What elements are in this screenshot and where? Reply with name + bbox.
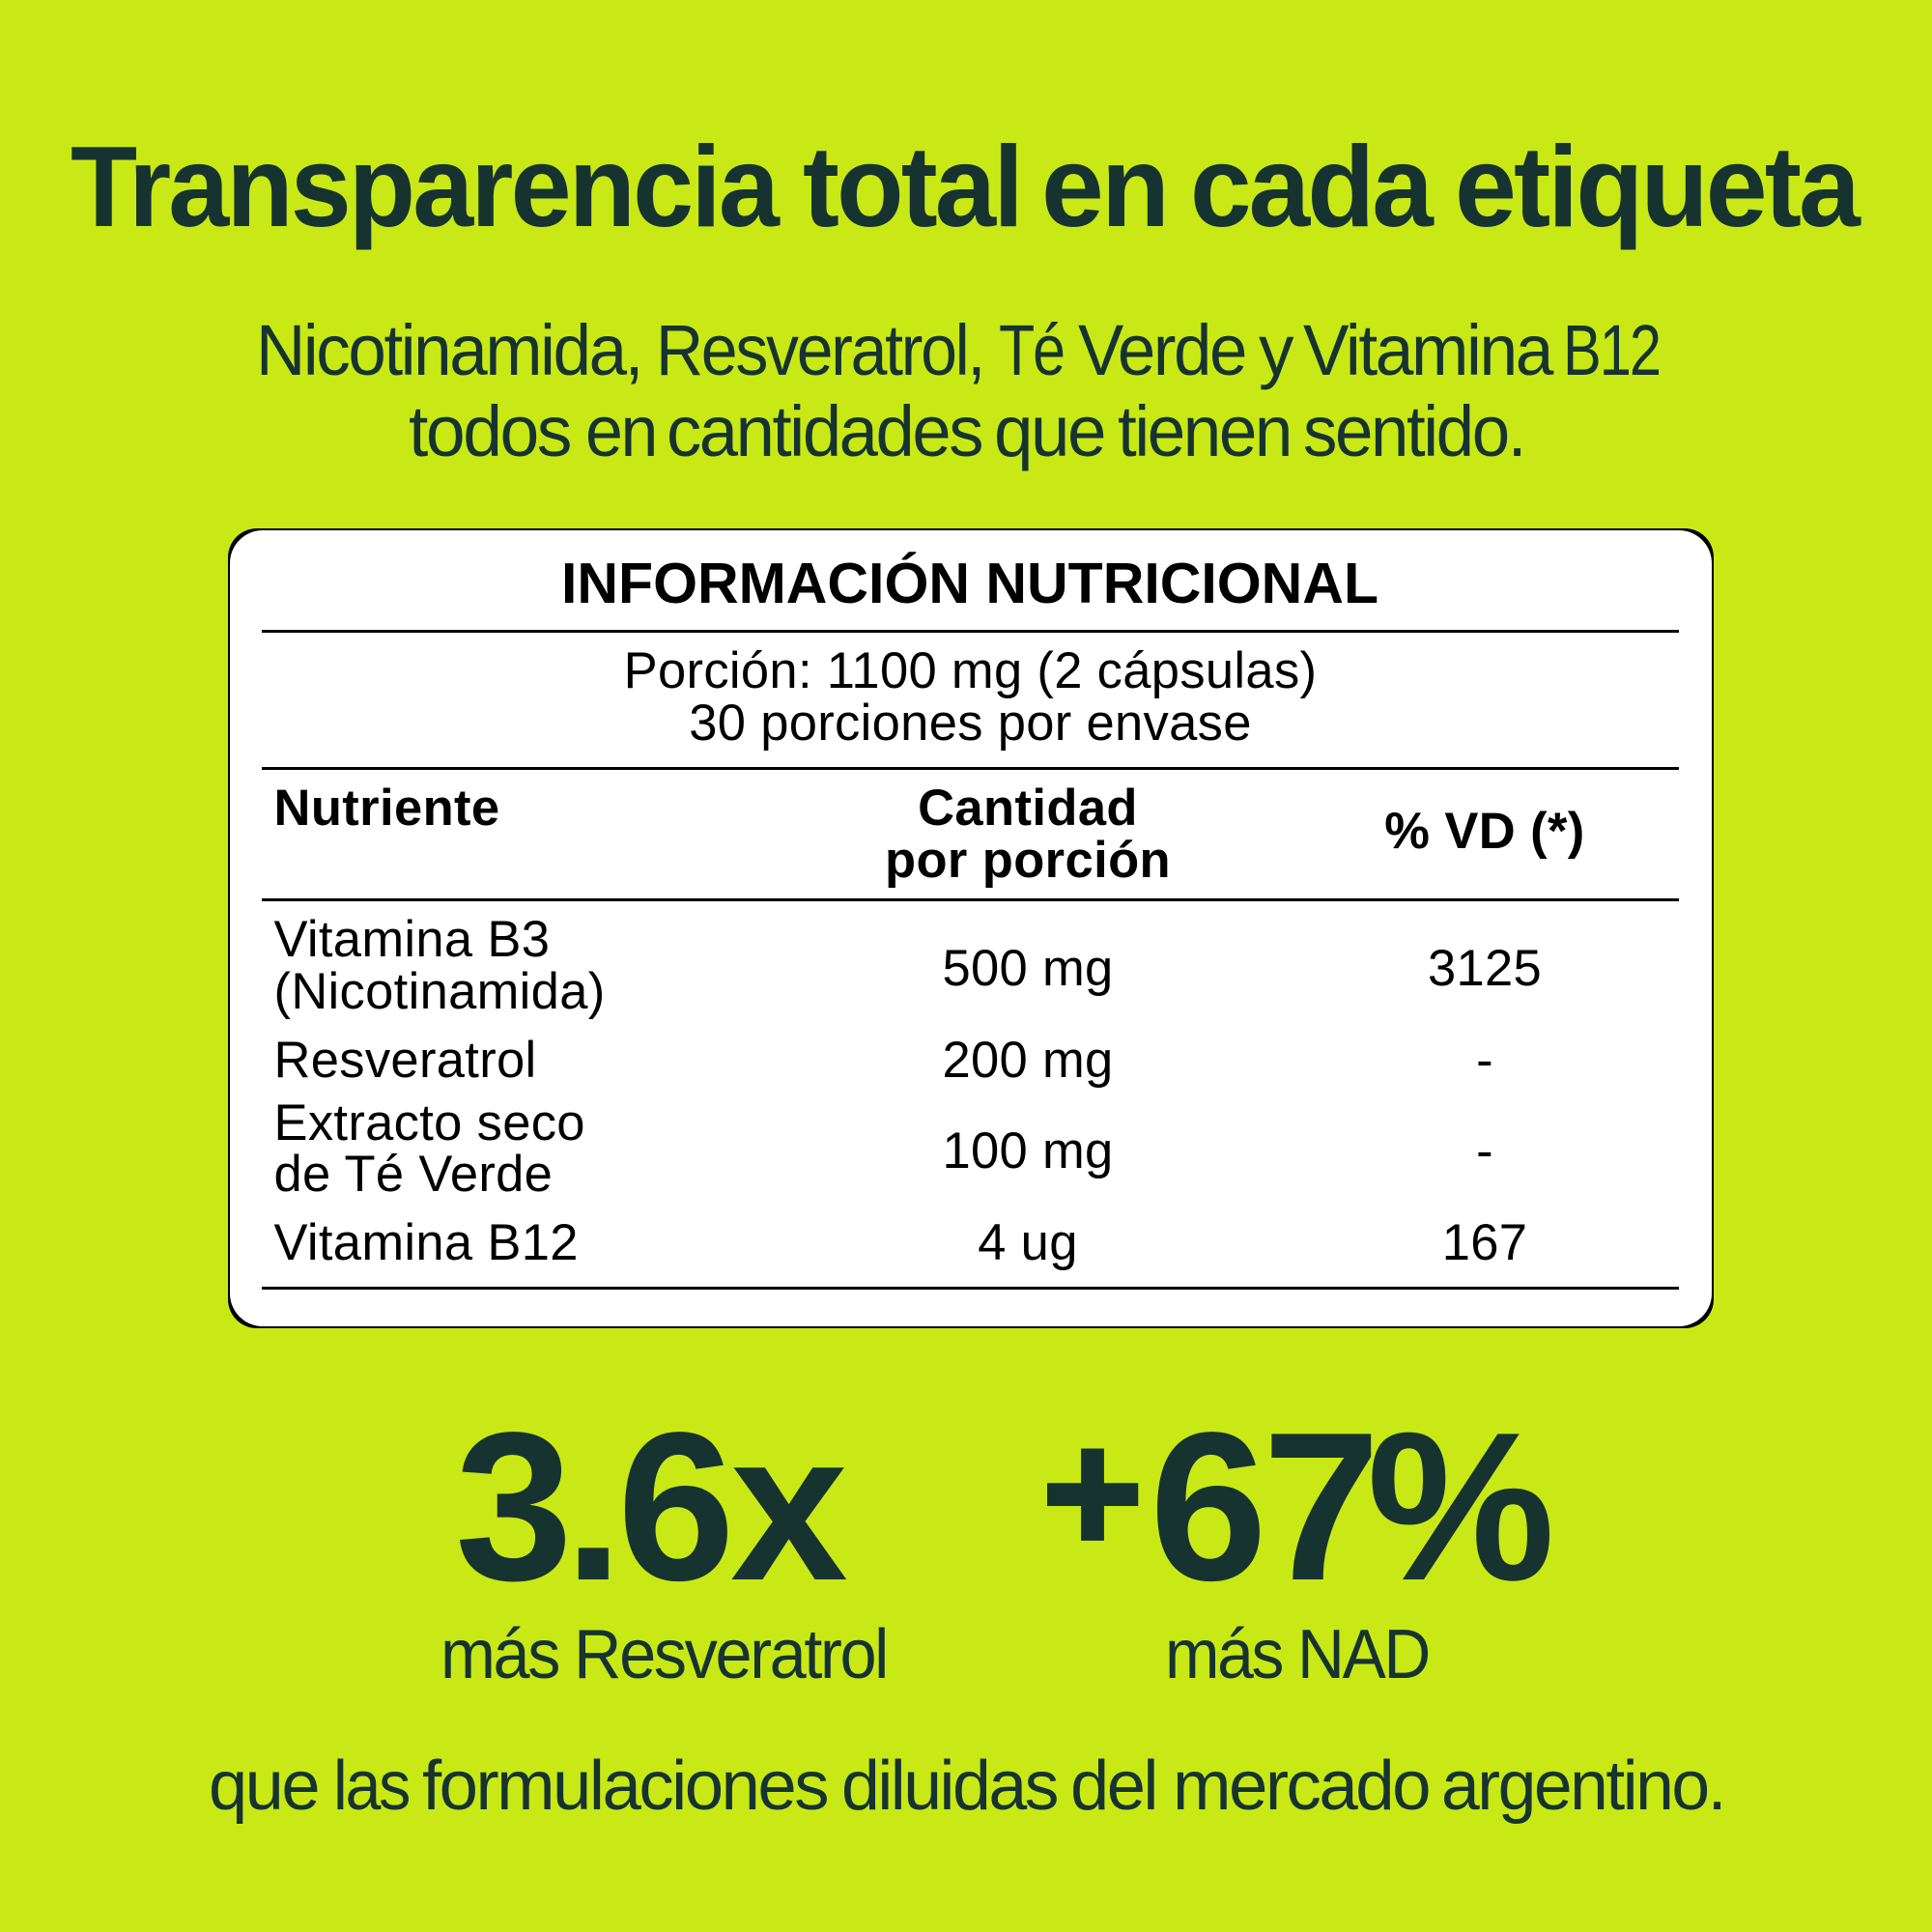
closing statement: diluidas	[841, 1747, 1057, 1825]
column headers: Nutriente	[274, 780, 500, 837]
row: Extracto seco de Té Verde: 100 mg	[942, 1122, 1114, 1179]
subtitle: Verde	[1078, 310, 1245, 390]
row: Extracto seco de Té Verde: de Té Verde	[274, 1146, 553, 1203]
title: en	[1041, 123, 1167, 251]
stat: +67% más NAD	[1041, 1389, 1555, 1693]
stat: 3.6x más Resveratrol: Resveratrol	[574, 1616, 887, 1693]
row: Vitamina B3	[274, 911, 1542, 1020]
closing statement	[209, 1747, 1724, 1825]
column headers: por porción	[885, 832, 1171, 889]
column headers: Cantidad	[918, 780, 1138, 837]
title: total	[803, 123, 1021, 251]
row: Resveratrol: -	[1476, 1032, 1493, 1089]
title: cada	[1190, 123, 1435, 251]
stat: 3.6x más Resveratrol	[440, 1389, 887, 1693]
subtitle: Vitamina	[1303, 310, 1554, 390]
subtitle: B12	[1563, 310, 1660, 390]
panel background	[228, 528, 1714, 1328]
table heading: INFORMACIÓN NUTRICIONAL	[561, 552, 1378, 615]
stat: +67% más NAD: más	[1165, 1616, 1282, 1693]
subtitle: tienen	[1118, 391, 1291, 471]
row: Resveratrol: 200 mg	[942, 1032, 1114, 1089]
row: Vitamina B12: 4 ug	[978, 1214, 1078, 1271]
title	[71, 123, 1861, 251]
row: Vitamina B3: Vitamina B3	[274, 911, 550, 968]
closing statement: que	[209, 1747, 318, 1825]
row: Vitamina B3: (Nicotinamida)	[274, 963, 606, 1020]
panel: nutrition table	[228, 528, 1714, 1328]
stat: +67% más NAD: +	[1041, 1396, 1144, 1590]
row: Resveratrol: Resveratrol	[274, 1032, 537, 1089]
subtitle: sentido.	[1303, 391, 1524, 471]
row: Vitamina B3: 3125	[1428, 940, 1542, 997]
stat: +67% más NAD: NAD	[1297, 1616, 1429, 1693]
row: Extracto seco de Té Verde	[274, 1094, 1493, 1203]
row: Vitamina B12: 167	[1442, 1214, 1527, 1271]
closing statement: mercado	[1173, 1747, 1429, 1825]
stat: 3.6x más Resveratrol: 3.6x	[455, 1389, 848, 1625]
subtitle: que	[994, 391, 1104, 471]
row: Extracto seco de Té Verde: -	[1476, 1122, 1493, 1179]
row: Extracto seco de Té Verde: Extracto seco	[274, 1094, 585, 1151]
subtitle: todos	[409, 391, 570, 471]
closing statement: formulaciones	[422, 1747, 827, 1825]
subtitle: y	[1259, 310, 1293, 390]
column headers: % VD (*)	[1384, 803, 1585, 860]
row: Vitamina B3: 500 mg	[942, 940, 1114, 997]
subtitle	[256, 310, 1660, 471]
row: Vitamina B12	[274, 1214, 1527, 1271]
row: Resveratrol	[274, 1032, 1493, 1089]
title: etiqueta	[1455, 123, 1861, 251]
subtitle: Té	[999, 310, 1064, 390]
serving information: Porción: 1100 mg (2 cápsulas)	[624, 642, 1317, 699]
row: Vitamina B12: Vitamina B12	[274, 1214, 579, 1271]
subtitle: en	[585, 391, 656, 471]
title: Transparencia	[71, 123, 781, 251]
stat: 3.6x más Resveratrol: más	[440, 1616, 558, 1693]
serving information: 30 porciones por envase	[689, 695, 1252, 752]
closing statement: argentino.	[1441, 1747, 1724, 1825]
subtitle: Resveratrol,	[656, 310, 983, 390]
stat: +67% más NAD: 67%	[1150, 1389, 1555, 1625]
column headers	[274, 780, 1585, 889]
closing statement: del	[1070, 1747, 1156, 1825]
subtitle: Nicotinamida,	[256, 310, 641, 390]
subtitle: cantidades	[667, 391, 981, 471]
serving information	[624, 642, 1317, 752]
closing statement: las	[333, 1747, 409, 1825]
